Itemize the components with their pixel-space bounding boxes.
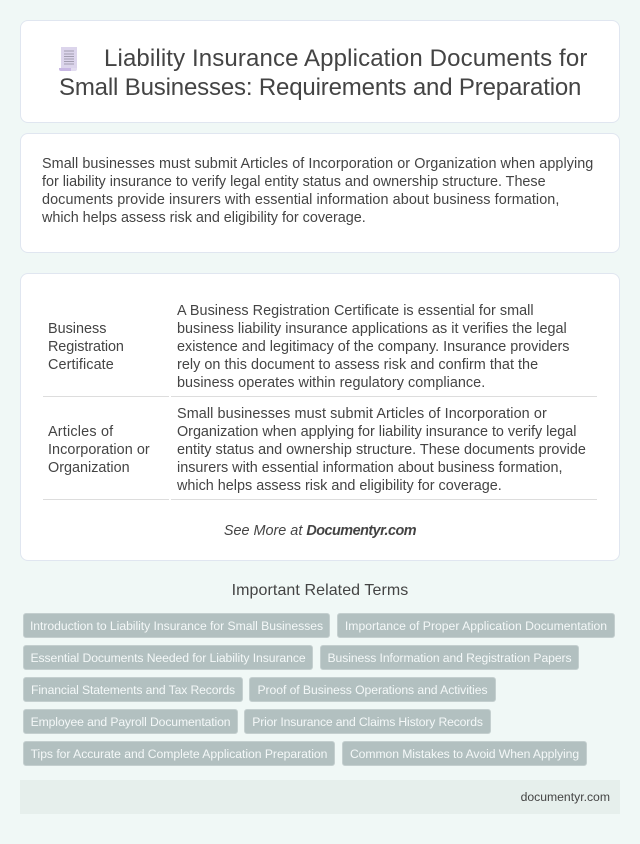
tag list: related terms: Tips for Accurate and Complete Application Preparation bbox=[31, 747, 327, 761]
intro text: which helps assess risk and eligibility for coverage. bbox=[42, 210, 366, 226]
title bbox=[59, 45, 587, 101]
tag list: related terms: Employee and Payroll Documentation bbox=[31, 715, 230, 729]
tag list: related terms: Introduction to Liability Insurance for Small Businesses bbox=[30, 619, 323, 633]
table row: Business Registration Certificate: rely on this document to assess risk and confirm that the bbox=[177, 357, 538, 373]
tag list: related terms: Prior Insurance and Claims History Records bbox=[252, 715, 483, 729]
tag list: related terms: Financial Statements and Tax Records bbox=[31, 683, 235, 697]
icon: document scroll bbox=[59, 47, 77, 71]
table row: Articles of Incorporation or Organization: which helps assess risk and eligibility for coverage. bbox=[177, 478, 502, 494]
table row: Business Registration Certificate: Registration bbox=[48, 339, 124, 355]
title: Liability Insurance Application Documents for bbox=[104, 45, 587, 72]
table row: Articles of Incorporation or Organization: Small businesses must submit Articles of Incorporation or bbox=[177, 406, 547, 422]
table row: Articles of Incorporation or Organization: Incorporation or bbox=[48, 442, 150, 458]
table row: Articles of Incorporation or Organization: insurers with essential information about business formation, bbox=[177, 460, 563, 476]
tag list: related terms: Essential Documents Needed for Liability Insurance bbox=[30, 651, 306, 665]
see more link: See More at Documentyr.com bbox=[224, 523, 416, 539]
intro text bbox=[42, 156, 593, 226]
table row: Articles of Incorporation or Organization: Articles of bbox=[48, 424, 113, 440]
panel: intro card bbox=[20, 133, 620, 253]
table row: Business Registration Certificate: Certificate bbox=[48, 357, 114, 373]
heading: related terms: Important Related Terms bbox=[232, 582, 408, 599]
table row: Business Registration Certificate: business operates within regulatory compliance. bbox=[177, 375, 485, 391]
table row: Business Registration Certificate: A Business Registration Certificate is essential for small bbox=[177, 303, 534, 319]
tag list: related terms: Proof of Business Operations and Activities bbox=[257, 683, 488, 697]
table row: Business Registration Certificate bbox=[48, 303, 569, 391]
table row: Business Registration Certificate: Business bbox=[48, 321, 106, 337]
panel: table card bbox=[20, 273, 620, 561]
table row: Articles of Incorporation or Organization: Organization bbox=[48, 460, 130, 476]
tag list: related terms: Importance of Proper Application Documentation bbox=[345, 619, 607, 633]
table row: Articles of Incorporation or Organization: Organization when applying for liability insurance to verify legal bbox=[177, 424, 576, 440]
intro text: documents provide insurers with essential information about business formation, bbox=[42, 192, 559, 208]
tag list: related terms: Common Mistakes to Avoid When Applying bbox=[350, 747, 579, 761]
tag list: related terms bbox=[23, 613, 615, 766]
table row: Articles of Incorporation or Organization bbox=[48, 406, 586, 494]
footer text: documentyr.com bbox=[521, 790, 610, 804]
footer bar bbox=[20, 780, 620, 814]
table row: Business Registration Certificate: existence and legitimacy of the company. Insurance providers bbox=[177, 339, 569, 355]
panel: title card bbox=[20, 20, 620, 123]
tag list: related terms: Business Information and Registration Papers bbox=[328, 651, 572, 665]
title: Small Businesses: Requirements and Preparation bbox=[59, 74, 581, 101]
table row: Articles of Incorporation or Organization: entity status and ownership structure. These documents provide bbox=[177, 442, 586, 458]
table row: Business Registration Certificate: business liability insurance applications as it verifies the legal bbox=[177, 321, 567, 337]
intro text: Small businesses must submit Articles of Incorporation or Organization when applying bbox=[42, 156, 593, 172]
intro text: for liability insurance to verify legal entity status and ownership structure. These bbox=[42, 174, 546, 190]
